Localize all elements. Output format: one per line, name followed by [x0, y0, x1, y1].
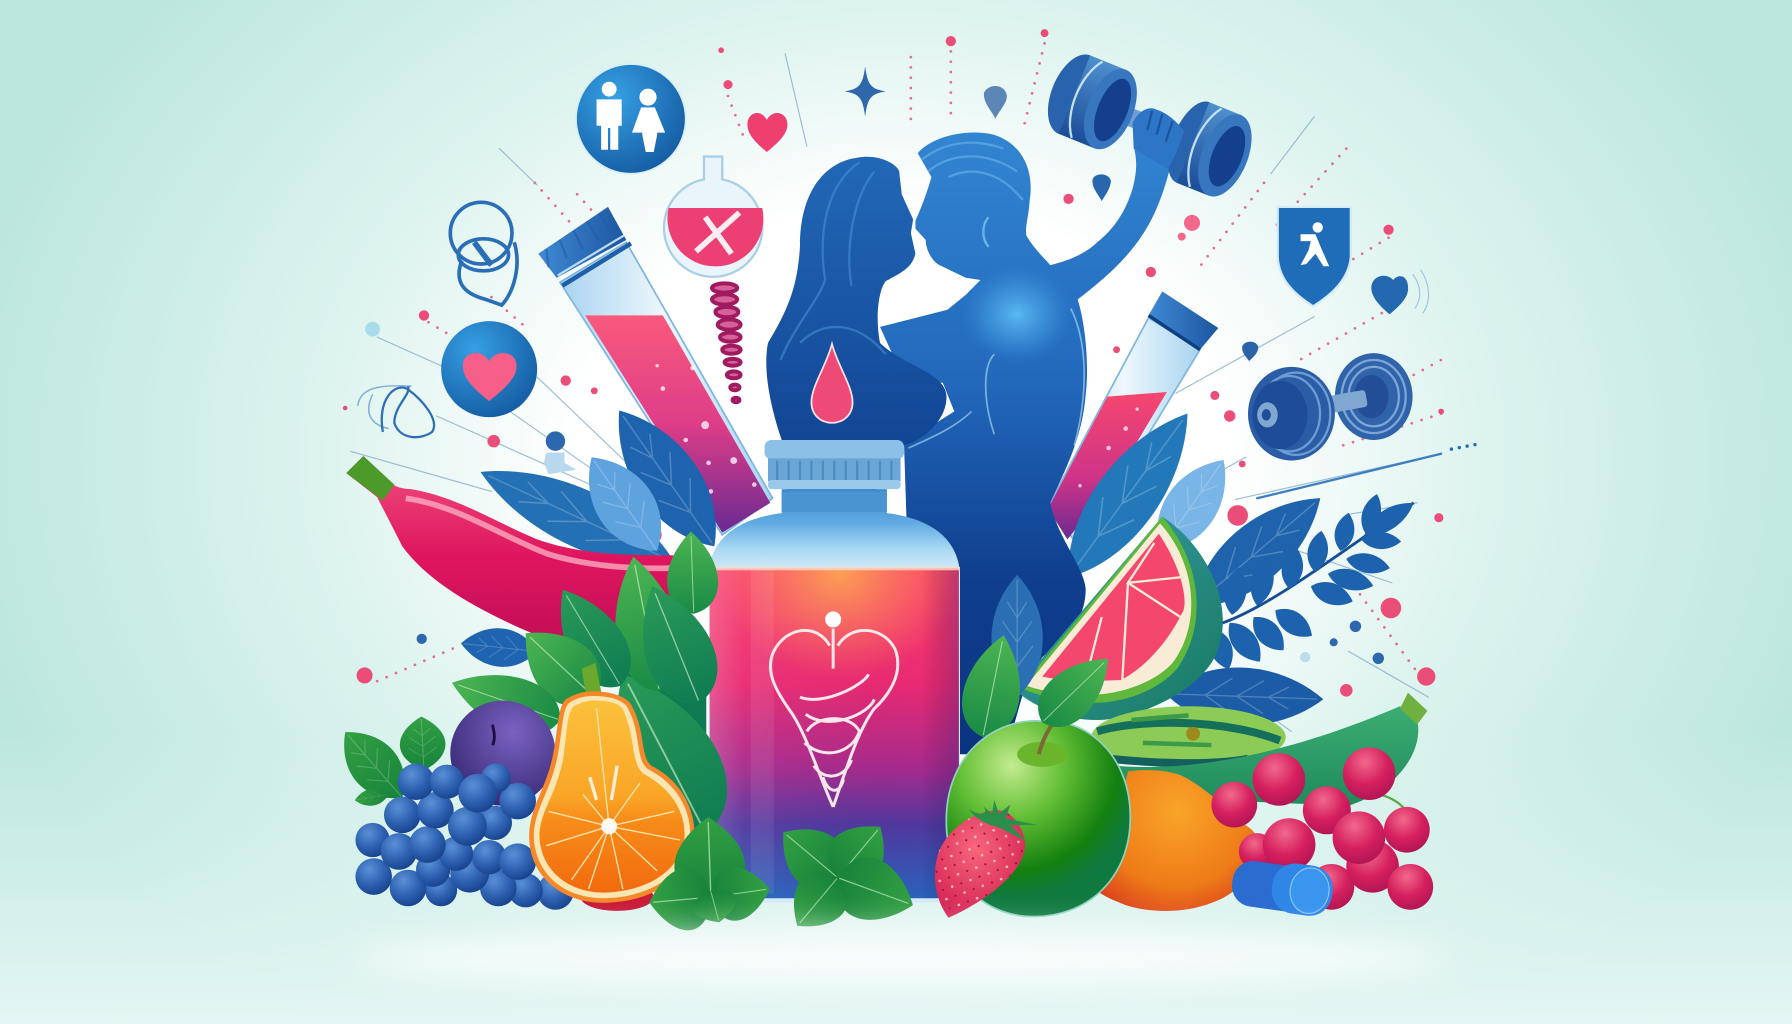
pink banana [346, 456, 686, 640]
mint leaves: right cluster [765, 809, 924, 943]
dumbbell: right [1248, 353, 1413, 461]
bottle [709, 440, 960, 903]
spiral tube [712, 283, 741, 402]
plum [450, 701, 555, 806]
bottle logo: heart and caduceus [770, 629, 898, 807]
ear [983, 217, 989, 247]
icon: small blue drop near arm [1092, 174, 1111, 201]
icon: blue heart right [1371, 270, 1429, 314]
green leaves left of bottle [443, 531, 749, 856]
green leaf beside apple [955, 575, 1043, 743]
man figure [597, 82, 622, 150]
blue capsule [1229, 855, 1336, 919]
blue leaves behind bottle [459, 393, 1339, 728]
bottle cap [765, 440, 904, 512]
left plate [1248, 367, 1335, 461]
orange pear half [529, 663, 695, 903]
hand gripping bar [1133, 108, 1184, 169]
right plates [1158, 95, 1262, 204]
dumbbell: raised in hand [1037, 46, 1262, 204]
ground shadow [354, 911, 1454, 985]
right plate [1335, 353, 1413, 440]
icon: pink balloon drop [1178, 215, 1200, 241]
icon: sketched pill scribble [358, 386, 434, 437]
mint leaves: left cluster [647, 816, 773, 934]
left plates [1037, 47, 1147, 157]
icon: heart badge [441, 321, 537, 417]
grape leaves [327, 715, 447, 813]
icon: pink heart [747, 113, 787, 152]
icon: blue knob pin [544, 431, 576, 474]
radiating dotted lines and dots [343, 29, 1481, 731]
fern branch [1203, 492, 1419, 673]
orange lemon [1098, 770, 1261, 911]
icon: sparkle star [845, 66, 886, 117]
test tube: left [538, 207, 773, 535]
test tube: right [1047, 291, 1218, 546]
green apple [946, 641, 1130, 917]
red fruit under orange [581, 883, 654, 911]
blood drop [811, 344, 853, 423]
couple: woman silhouette [766, 157, 946, 503]
woman figure [632, 89, 665, 152]
icon: small blue knob [1242, 342, 1258, 361]
watermelon [1091, 706, 1286, 768]
icon: interlocked rings [450, 202, 517, 305]
red berries [1211, 747, 1433, 910]
shaft [1324, 390, 1368, 414]
bottle glass body [709, 489, 960, 903]
bottle liquid [710, 568, 959, 898]
icon: people badge [576, 64, 686, 174]
icon: small blue drop top [984, 86, 1007, 119]
icon: running shield [1278, 207, 1351, 306]
couple: man silhouette [880, 114, 1177, 754]
flask with spiral [664, 157, 763, 402]
blue grapes [355, 763, 574, 910]
strawberry [935, 800, 1038, 918]
zucchini [1114, 693, 1427, 806]
citrus slice [1015, 517, 1223, 720]
